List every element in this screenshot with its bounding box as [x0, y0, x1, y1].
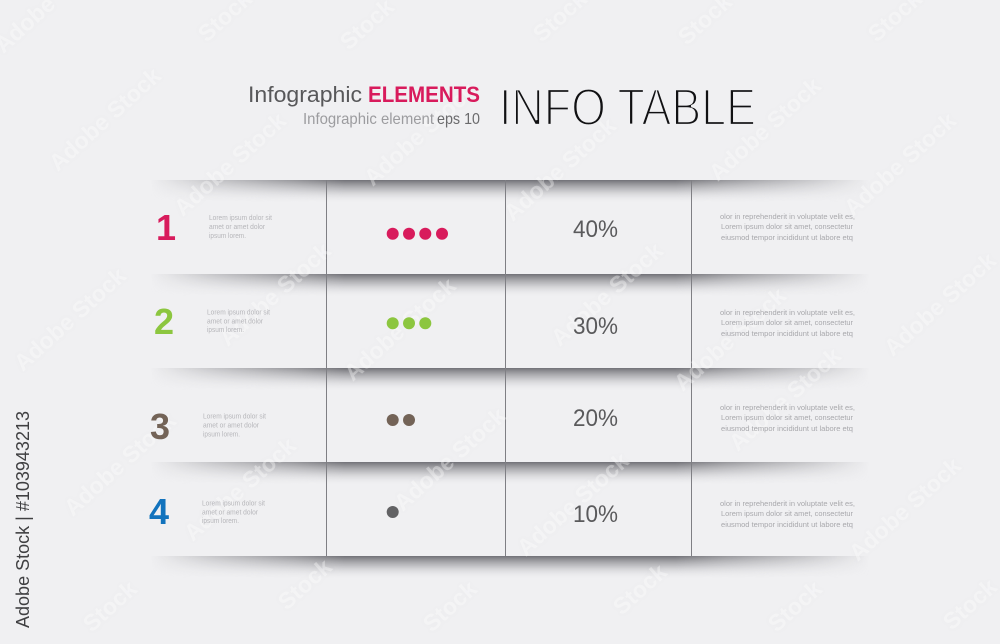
- watermark pattern: Stock: [418, 575, 482, 637]
- row 2 description: ipsum lorem.: [207, 327, 244, 334]
- vertical stock id label: Adobe Stock | #103943213: [13, 411, 33, 628]
- row 3 description: [203, 414, 266, 438]
- watermark pattern: Adobe Stock: [879, 247, 1000, 361]
- watermark pattern: Stock: [763, 575, 827, 637]
- row 3 notes: eiusmod tempor incididunt ut labore etq: [721, 424, 853, 433]
- row 1 description: ipsum lorem.: [209, 233, 246, 240]
- watermark pattern: Adobe Stock: [704, 72, 826, 186]
- row 2 description: amet or amet dolor: [207, 318, 264, 326]
- row 1 notes: Lorem ipsum dolor sit amet, consectetur: [721, 222, 853, 231]
- row 1 notes: olor in reprehenderit in voluptate velit es,: [720, 212, 855, 221]
- watermark pattern: Adobe Stock: [44, 62, 166, 176]
- watermark pattern: Adobe Stock: [9, 262, 131, 376]
- watermark pattern: Stock: [78, 575, 142, 637]
- row 4 notes: Lorem ipsum dolor sit amet, consectetur: [721, 509, 853, 518]
- table: row shadows: [150, 180, 870, 578]
- row 4 notes: eiusmod tempor incididunt ut labore etq: [721, 520, 853, 529]
- row 2 notes: [720, 308, 855, 338]
- row 3 description: Lorem ipsum dolor sit: [203, 414, 266, 420]
- row 4: [149, 491, 855, 532]
- watermark pattern: Stock: [938, 573, 1000, 635]
- row 4 description: ipsum lorem.: [202, 518, 239, 525]
- row 3 notes: [720, 403, 855, 433]
- watermark pattern: Adobe Stock: [546, 237, 668, 351]
- watermark pattern: Adobe Stock: [724, 342, 846, 456]
- row 4 description: amet or amet dolor: [202, 510, 259, 516]
- header subline: Infographic element eps 10: eps 10: [437, 111, 480, 128]
- watermark pattern: Stock: [608, 558, 672, 620]
- row 3 number: 3: [150, 406, 170, 447]
- row 2 dots: [387, 317, 431, 329]
- watermark pattern: Adobe Stock: [512, 447, 634, 561]
- row 4 notes: [720, 499, 855, 529]
- watermark pattern: Adobe Stock: [169, 107, 291, 221]
- header line: Infographic ELEMENTS: ELEMENTS: [368, 82, 480, 107]
- header line: Infographic ELEMENTS: [248, 82, 480, 107]
- row 2 number: 2: [154, 301, 174, 342]
- row 3 dots: [387, 414, 415, 426]
- row 2 percent: 30%: [573, 313, 618, 340]
- row 3 description: ipsum lorem.: [203, 432, 240, 438]
- table: column dividers: [326, 180, 692, 556]
- row 4 percent: 10%: [573, 501, 618, 528]
- watermark pattern: Adobe Stock: [389, 402, 511, 516]
- row 2 notes: Lorem ipsum dolor sit amet, consectetur: [721, 318, 853, 327]
- header subline: Infographic element eps 10: Infographic element: [303, 111, 435, 128]
- header line: Infographic ELEMENTS: Infographic: [248, 82, 362, 107]
- row 3 notes: olor in reprehenderit in voluptate velit es,: [720, 403, 855, 412]
- row 3: [150, 403, 855, 447]
- watermark pattern: Adobe Stock: [839, 107, 961, 221]
- row 3 percent: 20%: [573, 405, 618, 432]
- row 1 number: 1: [156, 207, 176, 248]
- row 2 notes: olor in reprehenderit in voluptate velit es,: [720, 308, 855, 317]
- row 1 description: [209, 215, 272, 240]
- title: INFO TABLE: INFO TABLE: [499, 79, 756, 137]
- row 1 dots: [387, 228, 448, 240]
- row 1 description: Lorem ipsum dolor sit: [209, 215, 272, 222]
- row 2 notes: eiusmod tempor incididunt ut labore etq: [721, 329, 853, 338]
- header: infographic elements: [248, 82, 480, 128]
- row 2 description: Lorem ipsum dolor sit: [207, 310, 270, 316]
- row 2 description: [207, 310, 270, 334]
- row 2: [154, 301, 855, 342]
- row 3 notes: Lorem ipsum dolor sit amet, consectetur: [721, 413, 853, 422]
- watermark pattern: Adobe Stock: [499, 112, 621, 226]
- row 1 notes: [720, 212, 855, 242]
- watermark pattern: Adobe Stock: [359, 77, 481, 191]
- watermark pattern: Adobe Stock: [214, 237, 336, 351]
- watermark pattern: Adobe Stock: [339, 272, 461, 386]
- row 1 description: amet or amet dolor: [209, 224, 266, 231]
- row 4 description: Lorem ipsum dolor sit: [202, 500, 265, 508]
- watermark pattern: Stock: [273, 553, 337, 615]
- row 4 dot: [387, 506, 399, 518]
- row 4 description: [202, 500, 265, 525]
- watermark pattern: Adobe Stock: [844, 452, 966, 566]
- row 1 notes: eiusmod tempor incididunt ut labore etq: [721, 233, 853, 242]
- row 1 percent: 40%: [573, 216, 618, 243]
- row 3 description: amet or amet dolor: [203, 422, 260, 430]
- watermark pattern: Adobe Stock: [179, 432, 301, 546]
- row 4 number: 4: [149, 491, 169, 532]
- watermark pattern: Adobe Stock: [669, 282, 791, 396]
- row 1: [156, 207, 855, 248]
- row 4 notes: olor in reprehenderit in voluptate velit es,: [720, 499, 855, 508]
- watermark pattern: Adobe Stock: [59, 407, 181, 521]
